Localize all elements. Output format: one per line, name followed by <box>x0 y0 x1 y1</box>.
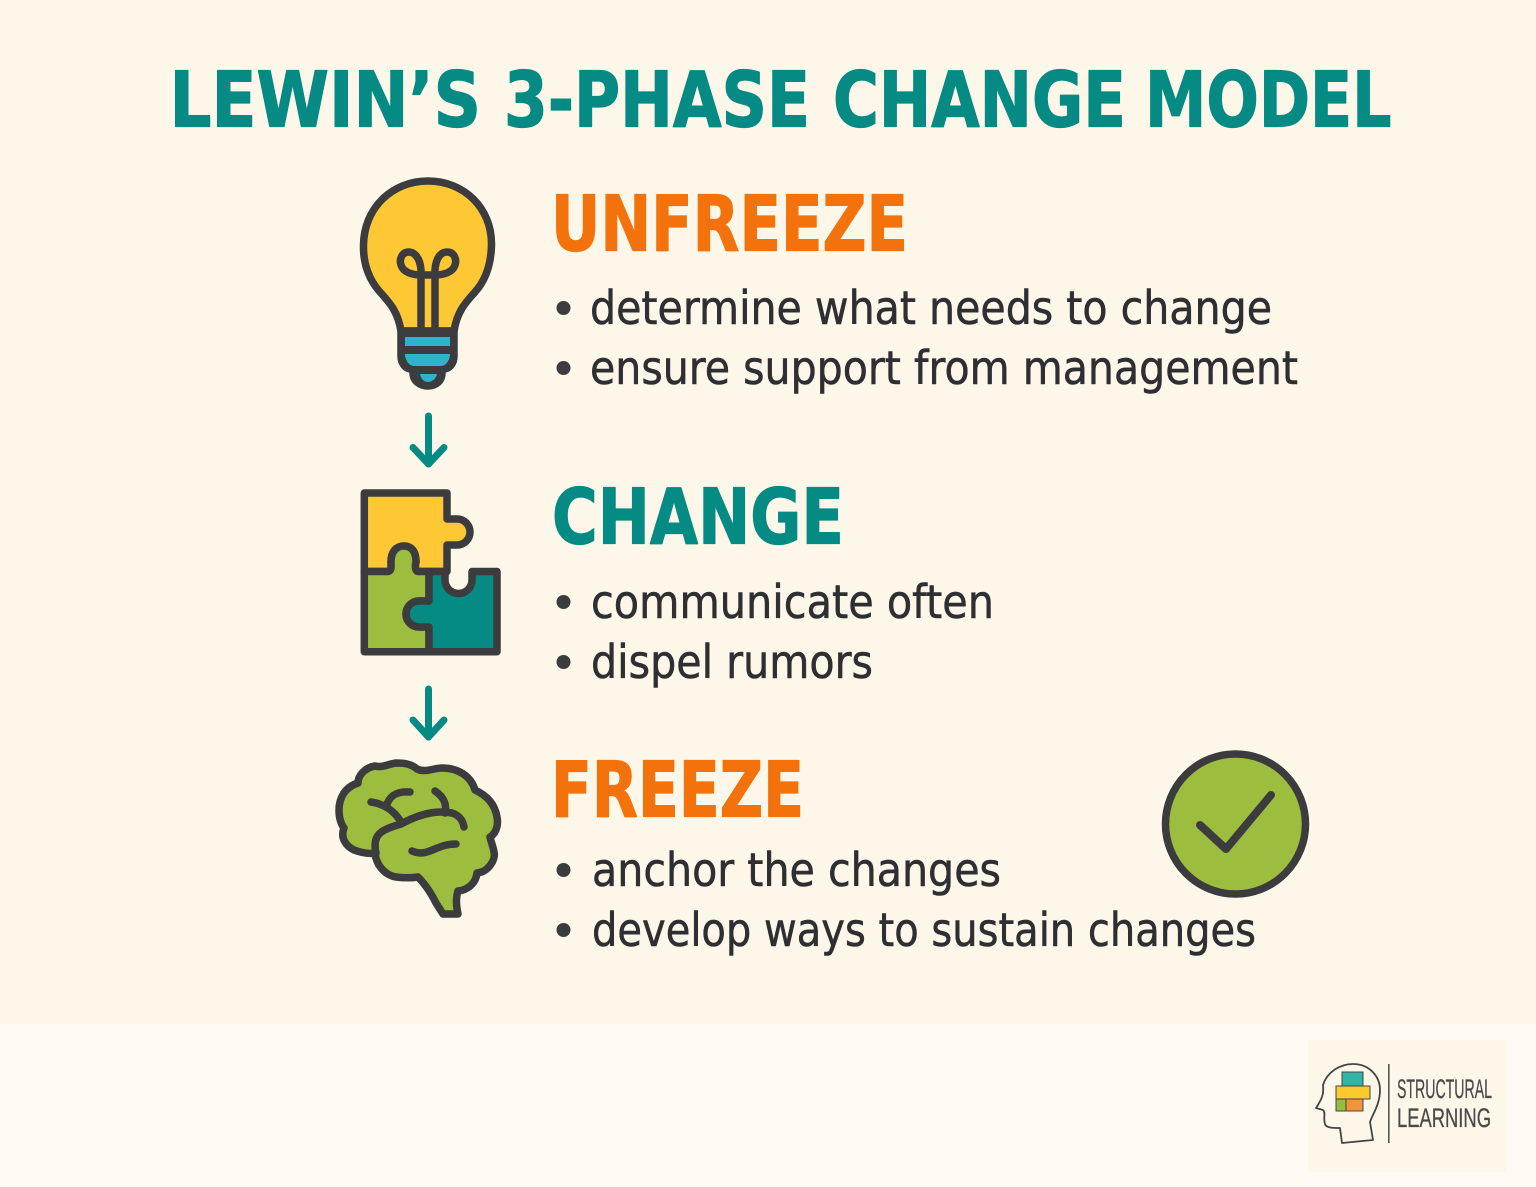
icon: brain <box>339 763 497 914</box>
arrow: change to freeze <box>413 689 444 737</box>
bullet list: freeze <box>556 843 1256 957</box>
title: MODEL <box>1145 56 1392 146</box>
bullet list: change: communicate often <box>591 575 994 629</box>
arrow: unfreeze to change <box>413 416 444 464</box>
logo wordmark <box>1397 1074 1492 1133</box>
bullet list: unfreeze <box>556 281 1298 395</box>
bullet list: freeze: anchor the changes <box>592 843 1001 897</box>
bullet list: change: dispel rumors <box>591 635 873 689</box>
title: LEWIN’S <box>170 56 481 146</box>
title <box>170 56 1392 146</box>
bullet list: unfreeze: determine what needs to change <box>590 281 1272 335</box>
section: unfreeze <box>551 180 1298 395</box>
bullet list: unfreeze: ensure support from management <box>590 341 1298 395</box>
section: change <box>552 474 994 689</box>
logo wordmark: LEARNING <box>1397 1103 1491 1133</box>
bullet list: change <box>556 575 994 689</box>
heading: freeze: FREEZE <box>551 746 804 836</box>
icon: light bulb <box>363 181 492 386</box>
heading: change: CHANGE <box>552 474 844 562</box>
logo: structural learning <box>1308 1040 1506 1172</box>
bullet list: freeze: develop ways to sustain changes <box>592 903 1256 957</box>
section: freeze <box>551 746 1256 957</box>
icon: head with blocks <box>1316 1064 1380 1143</box>
title: 3-PHASE <box>504 56 810 146</box>
heading: unfreeze: UNFREEZE <box>551 180 908 270</box>
title: CHANGE <box>833 56 1126 146</box>
icon: check mark badge <box>1166 754 1306 894</box>
icon: puzzle pieces <box>364 493 497 652</box>
